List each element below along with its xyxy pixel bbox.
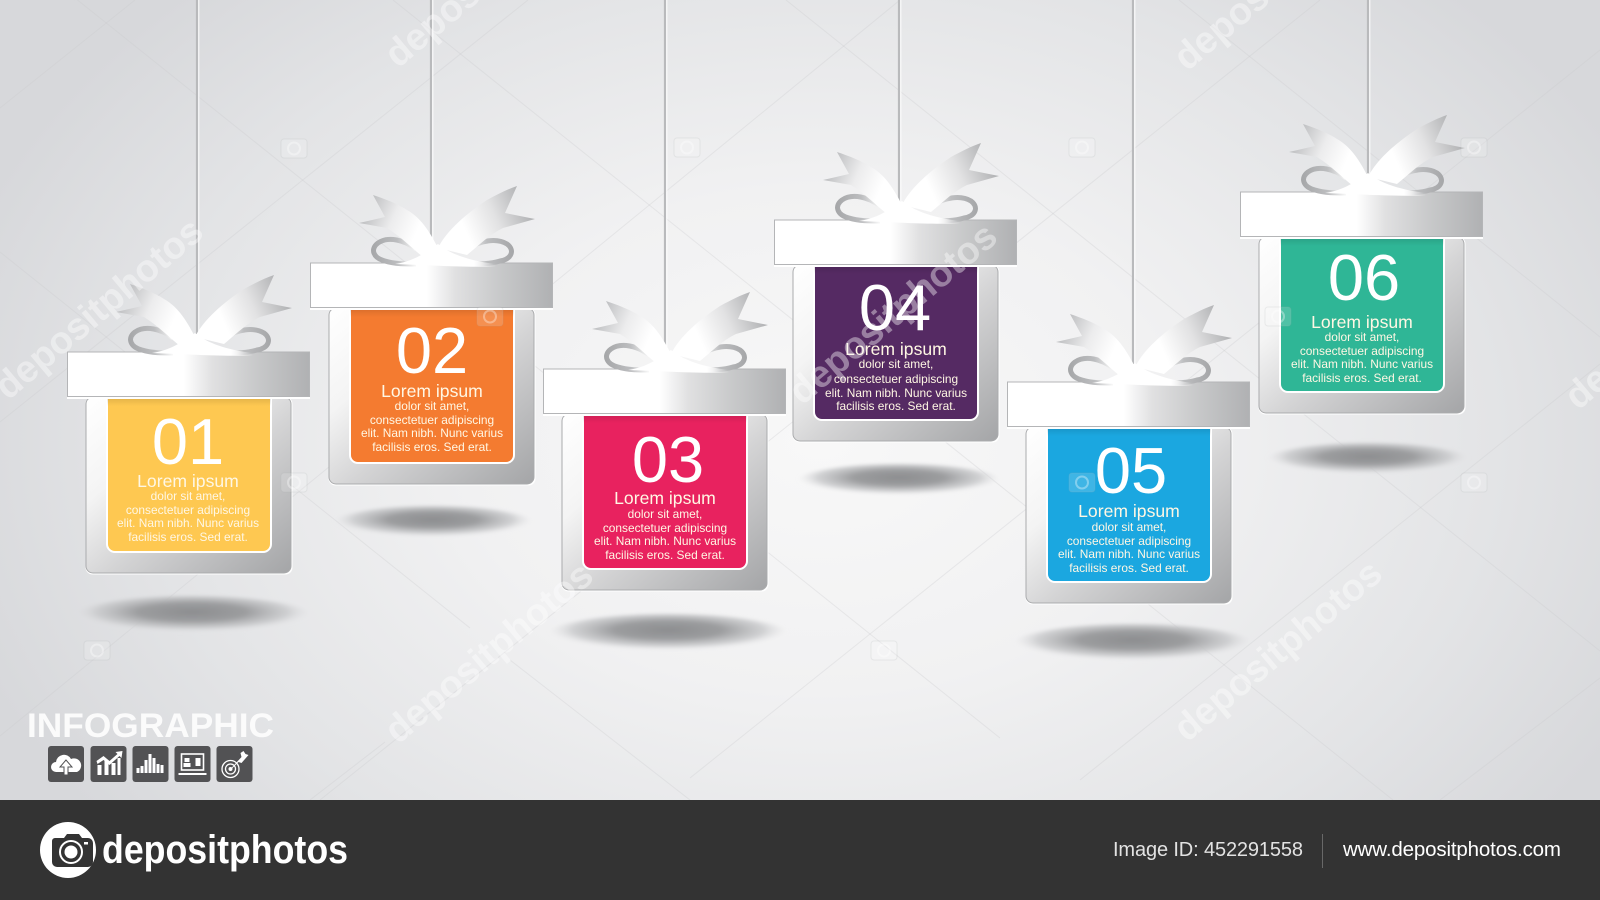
caption 04: Lorem ipsum	[845, 339, 947, 359]
caption 05: elit. Nam nibh. Nunc varius	[1058, 547, 1200, 561]
caption 03: consectetuer adipiscing	[603, 521, 727, 535]
icon: cloud upload	[48, 746, 84, 782]
colour panel 02	[350, 308, 514, 463]
gift 01	[67, 275, 312, 636]
lid and bow 02	[310, 186, 553, 317]
caption 01	[117, 471, 259, 544]
icon: rising chart	[90, 746, 126, 782]
caption 03: facilisis eros. Sed erat.	[605, 548, 725, 562]
icon: laptop	[174, 746, 210, 782]
caption 06: consectetuer adipiscing	[1300, 344, 1424, 358]
caption 04: dolor sit amet,	[859, 357, 933, 371]
caption 05: facilisis eros. Sed erat.	[1069, 561, 1189, 575]
caption 04	[825, 339, 967, 413]
box 06	[1258, 237, 1466, 414]
caption 02: elit. Nam nibh. Nunc varius	[361, 426, 503, 440]
caption 03: elit. Nam nibh. Nunc varius	[594, 534, 736, 548]
gift 06	[1240, 115, 1483, 477]
lid and bow 05	[1007, 305, 1250, 436]
watermark camera icons	[84, 138, 1487, 660]
box 03	[562, 414, 768, 592]
caption 06: Lorem ipsum	[1311, 312, 1413, 332]
gift 03	[543, 292, 788, 654]
caption 01: facilisis eros. Sed erat.	[128, 530, 248, 544]
caption 04: facilisis eros. Sed erat.	[836, 399, 956, 413]
watermark layer: depositphotos	[781, 215, 1005, 413]
logo wordmark: depositphotos	[102, 828, 348, 872]
number 05: 05	[1095, 434, 1167, 507]
icon: target	[216, 746, 252, 782]
lid and bow 04	[774, 143, 1017, 274]
caption 02: Lorem ipsum	[381, 381, 483, 401]
number 04: 04	[859, 271, 931, 344]
caption 05: dolor sit amet,	[1092, 520, 1166, 534]
image id: Image ID: 452291558	[1113, 839, 1303, 861]
hanging strings	[197, 0, 1370, 366]
shadow 03	[548, 614, 788, 654]
box 01	[86, 397, 292, 574]
number 02: 02	[396, 314, 468, 387]
caption 01: Lorem ipsum	[137, 471, 239, 491]
colour panel 01	[107, 397, 271, 552]
caption 03	[594, 488, 736, 562]
caption 02: facilisis eros. Sed erat.	[372, 440, 492, 454]
shadow 04	[797, 464, 1001, 498]
colour panel 06	[1280, 237, 1444, 392]
box 05	[1026, 427, 1232, 604]
watermark layer: depositphotos	[1166, 552, 1390, 750]
infographic heading: INFOGRAPHIC	[27, 707, 274, 745]
lid and bow 03	[543, 292, 786, 423]
footer logo	[40, 822, 348, 878]
footer band	[0, 800, 1600, 900]
gift 05	[1007, 305, 1253, 664]
gift 04	[774, 143, 1017, 498]
caption 06: dolor sit amet,	[1325, 330, 1399, 344]
colour panel 05	[1047, 427, 1211, 582]
caption 06: facilisis eros. Sed erat.	[1302, 371, 1422, 385]
caption 02	[361, 381, 503, 454]
lid and bow 06	[1240, 115, 1483, 246]
caption 02: dolor sit amet,	[395, 399, 469, 413]
footer separator	[1322, 834, 1323, 868]
number 01: 01	[152, 405, 224, 478]
icon row	[48, 746, 252, 782]
box 02	[328, 308, 536, 486]
caption 04: consectetuer adipiscing	[834, 372, 958, 386]
watermark layer: depositphotos	[377, 554, 601, 752]
colour panel 03	[583, 414, 747, 569]
shadow 02	[333, 506, 533, 540]
caption 03: dolor sit amet,	[628, 507, 702, 521]
shadow 01	[72, 596, 312, 636]
caption 06	[1291, 312, 1433, 385]
caption 05: Lorem ipsum	[1078, 501, 1180, 521]
site url: www.depositphotos.com	[1342, 838, 1561, 861]
caption 01: dolor sit amet,	[151, 489, 225, 503]
caption 02: consectetuer adipiscing	[370, 413, 494, 427]
caption 05	[1058, 501, 1200, 575]
icon: bars	[132, 746, 168, 782]
icon: camera logo	[40, 822, 96, 878]
colour panel 04	[814, 265, 978, 420]
caption 01: elit. Nam nibh. Nunc varius	[117, 516, 259, 530]
box 04	[792, 265, 1000, 442]
shadow 05	[1013, 624, 1253, 664]
number 06: 06	[1328, 241, 1400, 314]
caption 06: elit. Nam nibh. Nunc varius	[1291, 357, 1433, 371]
caption 04: elit. Nam nibh. Nunc varius	[825, 386, 967, 400]
number 03: 03	[632, 423, 704, 496]
shadow 06	[1266, 443, 1470, 477]
caption 05: consectetuer adipiscing	[1067, 534, 1191, 548]
caption 01: consectetuer adipiscing	[126, 503, 250, 517]
lid and bow 01	[67, 275, 310, 406]
gift 02	[310, 186, 553, 540]
caption 03: Lorem ipsum	[614, 488, 716, 508]
